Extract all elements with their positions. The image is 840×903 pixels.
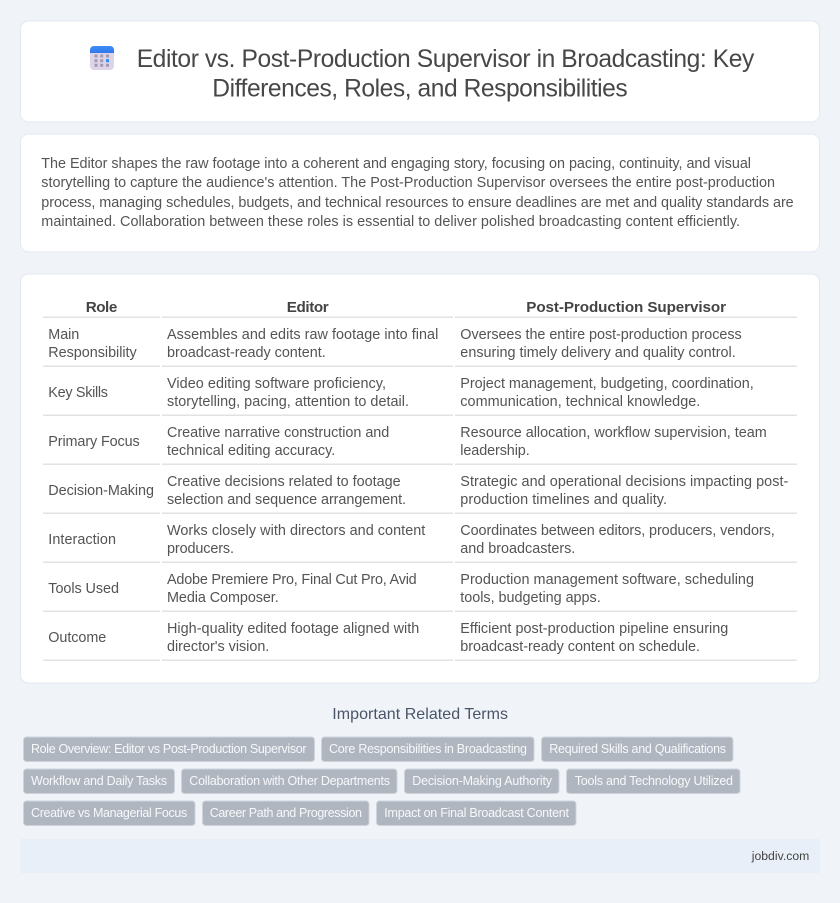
tag: decision-making authority: Decision-Making Authority <box>412 774 553 788</box>
table row: decision-making: Strategic and operational decisions impacting post- <box>460 474 789 490</box>
tag: required skills: Required Skills and Qualifications <box>549 742 726 756</box>
table row: main responsibility: ensuring timely delivery and quality control. <box>460 345 736 361</box>
table row: outcome <box>48 621 728 655</box>
text block: introduction paragraph: The Editor shapes the raw footage into a coherent and engaging story, focusing on pacing, continuity, and visual <box>41 156 751 172</box>
table row: primary focus: Primary Focus <box>48 434 140 450</box>
tag: career path: Career Path and Progression <box>210 806 362 820</box>
table row: main responsibility: Responsibility <box>48 345 137 361</box>
footer <box>20 839 820 873</box>
table row: primary focus: Creative narrative construction and <box>167 425 389 441</box>
table row: key skills: communication, technical knowledge. <box>460 394 700 410</box>
table row: outcome: Efficient post-production pipeline ensuring <box>460 621 728 637</box>
text block: introduction paragraph: process, managing schedules, budgets, and technical resources to ensure deadlines are met and quality standards are <box>41 195 794 211</box>
table row: decision-making <box>48 474 789 508</box>
table header: Post-Production Supervisor <box>526 299 726 316</box>
tag: creative vs managerial: Creative vs Managerial Focus <box>31 806 187 820</box>
table row: key skills: storytelling, pacing, attention to detail. <box>167 394 409 410</box>
footer: jobdiv.com <box>751 849 809 863</box>
tag: workflow: Workflow and Daily Tasks <box>31 774 167 788</box>
table row: interaction: Coordinates between editors, producers, vendors, <box>460 523 775 539</box>
tag: workflow <box>24 769 174 794</box>
title: Editor vs. Post-Production Supervisor in Broadcasting: Key <box>137 46 755 73</box>
table row: primary focus <box>48 425 767 459</box>
table row: main responsibility <box>48 327 742 361</box>
table row: interaction: producers. <box>167 541 234 557</box>
table header: Role <box>86 299 117 316</box>
table row: tools used: Tools Used <box>48 581 119 597</box>
table row: decision-making: production timelines and quality. <box>460 492 667 508</box>
table row: interaction: Works closely with directors and content <box>167 523 425 539</box>
tag: collaboration <box>182 769 397 794</box>
tag: collaboration: Collaboration with Other Departments <box>189 774 390 788</box>
table row: tools used: Media Composer. <box>167 590 279 606</box>
panel: comparison table <box>20 274 820 683</box>
tag: impact: Impact on Final Broadcast Content <box>384 806 570 820</box>
heading: important related terms: Important Related Terms <box>332 706 508 723</box>
table row: tools used: Production management software, scheduling <box>460 572 754 588</box>
table row: tools used: Adobe Premiere Pro, Final Cut Pro, Avid <box>167 572 417 588</box>
table row: tools used <box>48 572 754 606</box>
text block: introduction paragraph: storytelling to capture the audience's attention. The Post-Production Supervisor oversees the entire post-production <box>41 175 775 191</box>
table row: main responsibility: Main <box>48 327 79 343</box>
table row: key skills: Project management, budgeting, coordination, <box>460 376 754 392</box>
table row: key skills: Key Skills <box>48 385 108 401</box>
table row: decision-making: Decision-Making <box>48 483 154 499</box>
table row: decision-making: selection and sequence arrangement. <box>167 492 406 508</box>
icon: calendar <box>90 46 114 70</box>
table row: outcome: Outcome <box>48 630 106 646</box>
tag: required skills <box>542 737 733 762</box>
tag: decision-making authority <box>404 769 559 794</box>
table row: main responsibility: Oversees the entire post-production process <box>460 327 742 343</box>
title: Differences, Roles, and Responsibilities <box>212 76 628 102</box>
text block: introduction paragraph: maintained. Collaboration between these roles is essential to deliver polished broadcasting content efficiently. <box>41 214 740 230</box>
table row: key skills <box>48 376 754 410</box>
tag: tools and technology <box>566 769 740 794</box>
table row: main responsibility: broadcast-ready content. <box>167 345 326 361</box>
tag: career path <box>202 801 369 826</box>
table row: outcome: broadcast-ready content on schedule. <box>460 639 700 655</box>
table row: interaction: and broadcasters. <box>460 541 575 557</box>
panel: introduction <box>20 134 820 252</box>
table row: primary focus: technical editing accuracy. <box>167 443 335 459</box>
table row: outcome: High-quality edited footage aligned with <box>167 621 419 637</box>
table row: interaction: Interaction <box>48 532 116 548</box>
table row: primary focus: Resource allocation, workflow supervision, team <box>460 425 767 441</box>
title <box>137 46 755 102</box>
tag: role overview: Role Overview: Editor vs Post-Production Supervisor <box>31 742 306 756</box>
tag: core responsibilities: Core Responsibilities in Broadcasting <box>329 742 527 756</box>
table row: outcome: director's vision. <box>167 639 269 655</box>
tag: impact <box>376 801 576 826</box>
tag: core responsibilities <box>322 737 534 762</box>
text block: introduction paragraph <box>41 156 794 230</box>
panel: title card <box>20 21 820 122</box>
table row: tools used: tools, budgeting apps. <box>460 590 601 606</box>
table row: main responsibility: Assembles and edits raw footage into final <box>167 327 438 343</box>
panel: related term tags <box>24 737 740 826</box>
table header: Editor <box>287 299 329 316</box>
table row: key skills: Video editing software proficiency, <box>167 376 386 392</box>
table header <box>86 299 726 316</box>
tag: role overview <box>24 737 314 762</box>
table row: primary focus: leadership. <box>460 443 530 459</box>
tag: tools and technology: Tools and Technology Utilized <box>575 774 733 788</box>
tag: creative vs managerial <box>24 801 195 826</box>
table row: decision-making: Creative decisions related to footage <box>167 474 401 490</box>
table row: interaction <box>48 523 775 557</box>
